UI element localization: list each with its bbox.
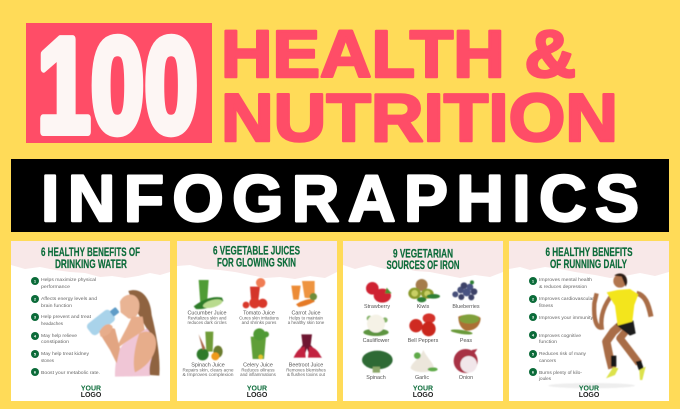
benefits list: fitness — [539, 303, 554, 309]
juice illustrations — [194, 278, 322, 360]
benefits list: 2 — [532, 296, 535, 302]
benefits list: 4 — [532, 332, 535, 338]
juice captions: Spinach Juice — [191, 362, 225, 368]
benefits list: Improves mental health — [539, 277, 592, 283]
food labels: Bell Peppers — [408, 338, 439, 344]
benefits list: 5 — [34, 352, 37, 356]
benefits list — [31, 277, 100, 376]
logo: YOUR — [247, 386, 267, 392]
juice captions — [182, 310, 327, 377]
juice captions: a healthy skin tone — [288, 320, 325, 325]
banner: INFOGRAPHICS: INFOGRAPHICS — [41, 161, 639, 235]
benefits list: 2 — [34, 296, 37, 302]
juice captions: reduces dark circles — [187, 320, 227, 325]
benefits list: Improves your immunity — [539, 315, 594, 321]
logo — [81, 386, 102, 399]
title — [213, 244, 300, 270]
food illustrations — [362, 279, 481, 373]
benefits list: Helps maximize physical — [41, 277, 96, 283]
title: 9 VEGETARIAN — [393, 246, 453, 260]
photo: woman drinking water — [85, 290, 160, 377]
benefits list: 6 — [532, 370, 535, 374]
benefits list: 4 — [34, 334, 37, 338]
photo: woman running — [548, 274, 651, 388]
food labels: Strawberry — [364, 304, 390, 310]
heading: HEALTH &: HEALTH & — [221, 17, 576, 92]
benefits list: 3 — [532, 314, 535, 320]
food labels — [363, 304, 480, 381]
title — [546, 245, 632, 271]
panel: sources of iron — [343, 241, 503, 401]
food labels: Onion — [459, 375, 473, 381]
logo: YOUR — [413, 386, 433, 392]
juice captions: Beetroot Juice — [289, 362, 323, 368]
benefits list: brain function — [41, 303, 72, 309]
juice captions: and inflammations — [240, 372, 277, 377]
juice captions: and shrinks pores — [242, 320, 277, 325]
logo — [247, 386, 268, 399]
logo: LOGO — [579, 392, 600, 399]
food labels: Blueberries — [452, 304, 480, 310]
food labels: Peas — [460, 338, 472, 344]
badge: 100: 100 — [37, 10, 198, 161]
benefits list: Improves cognitive — [539, 333, 581, 339]
juice captions: Cures skin irritations — [239, 316, 280, 320]
heading: NUTRITION: NUTRITION — [221, 80, 618, 156]
title: 6 HEALTHY BENEFITS — [546, 245, 632, 259]
logo: LOGO — [247, 392, 268, 399]
food labels: Spinach — [366, 375, 386, 381]
logo: LOGO — [81, 392, 102, 399]
title: 6 HEALTHY BENEFITS OF — [41, 245, 140, 259]
logo — [579, 386, 600, 399]
juice captions: Helps to maintain — [289, 316, 324, 320]
food labels: Garlic — [415, 375, 429, 381]
juice captions: Reduces oiliness — [241, 368, 275, 372]
title — [41, 245, 140, 271]
benefits list: cancers — [539, 358, 557, 364]
benefits list: 6 — [34, 370, 37, 374]
benefits list: Help prevent and treat — [41, 314, 92, 320]
logo — [413, 386, 434, 399]
benefits list: performance — [41, 284, 70, 290]
benefits list — [529, 277, 594, 382]
title: OF RUNNING DAILY — [550, 257, 627, 271]
juice captions: & Improves complexion — [182, 372, 234, 377]
benefits list: Boost your metabolic rate. — [41, 370, 100, 376]
benefits list: Reduces risk of many — [539, 351, 587, 357]
benefits list: 1 — [34, 278, 37, 284]
juice captions: Celery Juice — [243, 362, 273, 368]
juice captions: & flushes toxins out — [287, 372, 326, 377]
benefits list: & reduces depression — [539, 284, 587, 290]
logo: LOGO — [413, 392, 434, 399]
benefits list: May help treat kidney — [41, 351, 90, 357]
juice captions: Revitalizes skin and — [188, 316, 227, 320]
benefits list: Improves cardiovascular — [539, 296, 594, 302]
title: SOURCES OF IRON — [386, 258, 460, 272]
logo: YOUR — [579, 386, 599, 392]
juice captions: Repairs skin, clears acne — [182, 368, 234, 372]
juice captions: Tomato Juice — [243, 310, 275, 316]
benefits list: stones — [41, 358, 55, 364]
benefits list: Burns plenty of kilo- — [539, 370, 582, 376]
title: DRINKING WATER — [55, 257, 127, 271]
benefits list: 3 — [34, 314, 37, 320]
panel: vegetable juices — [177, 241, 337, 401]
benefits list: Affects energy levels and — [41, 296, 97, 302]
benefits list: headaches — [41, 321, 64, 327]
food labels: Cauliflower — [363, 338, 390, 344]
juice captions: Carrot Juice — [291, 310, 321, 316]
benefits list: joules — [538, 376, 552, 382]
title: 6 VEGETABLE JUICES — [213, 244, 300, 258]
juice captions: Removes blemishes — [286, 368, 327, 372]
panel: running daily — [509, 241, 669, 401]
panel: drinking water — [11, 241, 170, 401]
benefits list: function — [539, 339, 557, 345]
benefits list: 1 — [532, 278, 535, 284]
benefits list: constipation — [41, 339, 69, 345]
food labels: Kiwis — [417, 304, 430, 310]
title — [386, 246, 460, 272]
juice captions: Cucumber Juice — [188, 310, 226, 316]
logo: YOUR — [81, 386, 101, 392]
benefits list: 5 — [532, 352, 535, 356]
title: FOR GLOWING SKIN — [217, 256, 296, 270]
benefits list: May help relieve — [41, 333, 77, 339]
